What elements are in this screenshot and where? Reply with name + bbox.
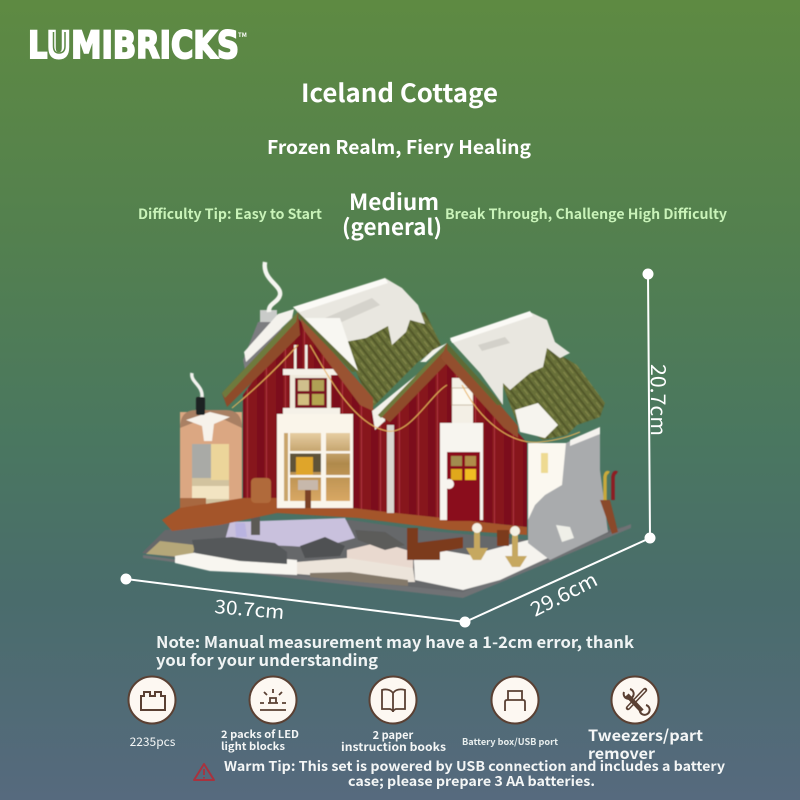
- label: 2 paper: [373, 727, 414, 743]
- gable eaves: [222, 312, 300, 407]
- logo: TM: [238, 30, 247, 39]
- difficulty level: [342, 185, 442, 242]
- item: tweezers: [588, 676, 703, 764]
- baseplate: [142, 520, 631, 598]
- difficulty level: Medium: [349, 185, 439, 217]
- note: [156, 629, 634, 671]
- note: you for your understanding: [156, 647, 378, 671]
- chimney: [243, 262, 282, 375]
- icon: tools: [612, 676, 658, 724]
- left roof: [222, 278, 441, 430]
- right roof: [378, 311, 605, 440]
- lamp posts: [466, 523, 527, 567]
- label: [221, 727, 299, 754]
- icon: warning: [194, 764, 214, 780]
- label: remover: [588, 742, 655, 764]
- height label: 20.7cm: [645, 364, 674, 436]
- label: [341, 727, 447, 755]
- subtitle: Frozen Realm, Fiery Healing: [267, 133, 532, 160]
- title: Iceland Cottage: [301, 74, 498, 110]
- warm tip text: case; please prepare 3 AA batteries.: [348, 770, 595, 790]
- door surround: [440, 423, 483, 520]
- warm tip text: [224, 755, 725, 790]
- label: light blocks: [221, 739, 285, 754]
- deck: [162, 498, 527, 560]
- bay window: [277, 414, 353, 508]
- difficulty level: (general): [342, 210, 442, 242]
- door: [444, 452, 480, 521]
- dimension lines: [122, 270, 654, 626]
- difficulty tip left: Difficulty Tip: Easy to Start: [138, 204, 322, 224]
- barrel: [251, 478, 271, 503]
- right house wall: [385, 352, 527, 527]
- left house wall: [243, 318, 387, 512]
- item: books: [341, 676, 447, 755]
- label: [588, 724, 703, 764]
- snow right roof: [450, 312, 570, 405]
- label: 2235pcs: [130, 733, 176, 750]
- icon: battery box: [492, 676, 538, 724]
- stone side wall: [528, 427, 618, 560]
- logo: LUMIBRICKS: [28, 24, 239, 67]
- gable eaves right: [378, 343, 452, 422]
- item: bricks: [128, 676, 176, 750]
- item: LED: [221, 676, 299, 754]
- icon: brick: [128, 676, 176, 724]
- label: Battery box/USB port: [462, 735, 558, 748]
- difficulty tip right: Break Through, Challenge High Difficulty: [445, 204, 727, 224]
- item: battery box: [462, 676, 558, 748]
- label: Tweezers/part: [588, 724, 703, 746]
- label: 2 packs of LED: [221, 727, 299, 742]
- rocks and ice: [192, 515, 405, 564]
- note: Note: Manual measurement may have a 1-2cm error, thank: [156, 629, 634, 653]
- cottage model: [142, 262, 631, 598]
- gable sign: [452, 378, 473, 424]
- thatch right roof: [500, 340, 605, 440]
- label: instruction books: [341, 739, 447, 755]
- warm tip: [194, 755, 725, 790]
- string lights: [232, 345, 580, 442]
- width label: 30.7cm: [213, 592, 286, 625]
- thatch left roof: [340, 312, 441, 408]
- snow left roof: [293, 278, 425, 371]
- upper window: [283, 369, 340, 417]
- small hut: [180, 373, 242, 520]
- depth label: 29.6cm: [525, 564, 602, 622]
- icon: light: [250, 676, 296, 724]
- icon: book: [370, 676, 416, 724]
- warm tip text: Warm Tip: This set is powered by USB connection and includes a battery: [224, 755, 725, 775]
